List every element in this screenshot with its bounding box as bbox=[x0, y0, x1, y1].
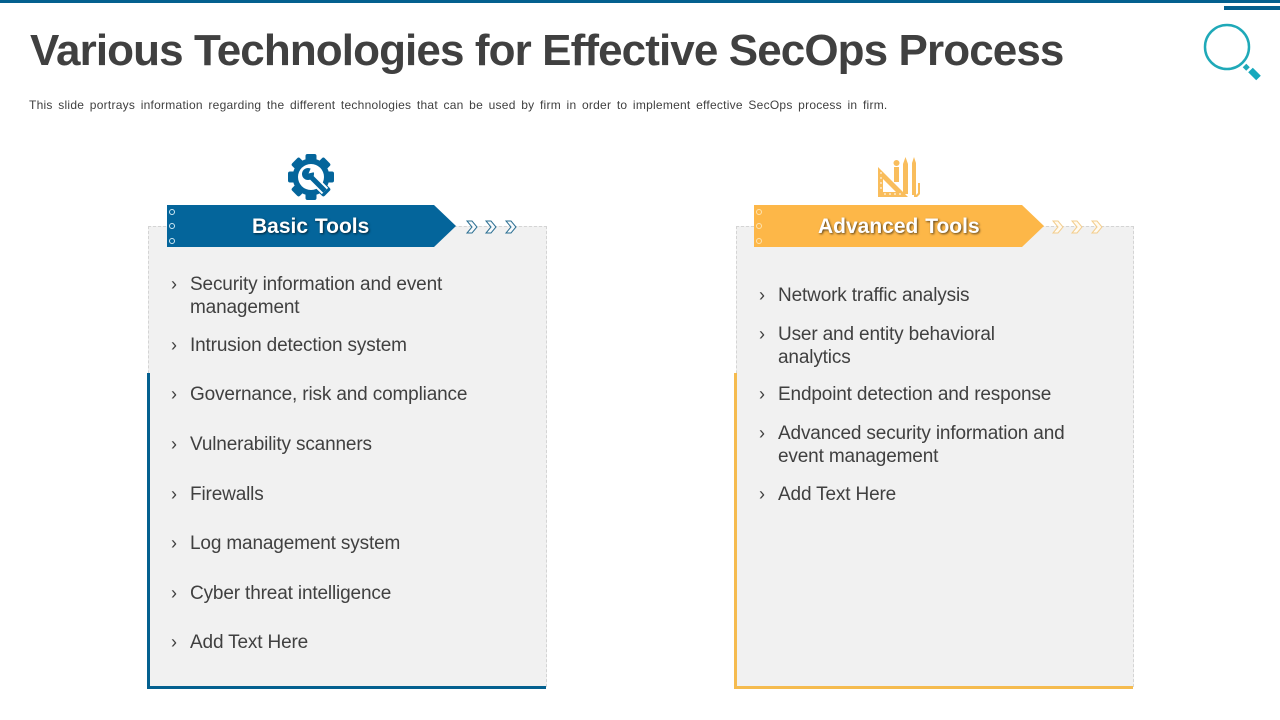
item: Governance, risk and compliance bbox=[190, 384, 467, 405]
item: User and entity behavioral bbox=[778, 324, 995, 345]
header: basic tools bbox=[167, 205, 456, 247]
chevrons: advanced tools bbox=[1052, 220, 1102, 234]
icon: gear and wrench bbox=[288, 154, 334, 200]
icon: drafting tools bbox=[878, 157, 920, 197]
subtitle: This slide portrays information regarding the different technologies that can be used by firm in order to implement effective SecOps process in firm. bbox=[29, 98, 888, 112]
text: › bbox=[171, 434, 177, 454]
item bbox=[759, 423, 1065, 467]
item: Endpoint detection and response bbox=[778, 384, 1051, 405]
item: Cyber threat intelligence bbox=[190, 583, 391, 604]
title: Various Technologies for Effective SecOps Process bbox=[30, 26, 1063, 75]
text: › bbox=[171, 583, 177, 603]
text: › bbox=[171, 632, 177, 652]
text: › bbox=[759, 324, 765, 344]
header text: basic tools: Basic Tools bbox=[252, 215, 369, 238]
panel: basic tools bbox=[148, 226, 547, 687]
text: › bbox=[759, 384, 765, 404]
chevrons: basic tools bbox=[466, 220, 517, 234]
item: Log management system bbox=[190, 533, 400, 554]
text: › bbox=[171, 384, 177, 404]
header text: advanced tools: Advanced Tools bbox=[818, 215, 980, 238]
item: event management bbox=[778, 446, 938, 467]
header: advanced tools bbox=[754, 205, 1044, 247]
text: › bbox=[759, 423, 765, 443]
item: Network traffic analysis bbox=[778, 285, 969, 306]
panel edge: basic tools bbox=[147, 373, 546, 689]
text: › bbox=[759, 484, 765, 504]
item bbox=[759, 324, 995, 368]
text: › bbox=[171, 335, 177, 355]
panel: advanced tools bbox=[736, 226, 1134, 687]
item: Firewalls bbox=[190, 484, 264, 505]
text: › bbox=[171, 484, 177, 504]
top right accent bar bbox=[1224, 6, 1280, 10]
list: basic tools bbox=[171, 274, 467, 653]
panel edge: advanced tools bbox=[734, 373, 1133, 689]
item: analytics bbox=[778, 347, 851, 368]
list: advanced tools bbox=[759, 285, 1065, 505]
text: › bbox=[759, 285, 765, 305]
item: Intrusion detection system bbox=[190, 335, 407, 356]
item bbox=[171, 274, 442, 318]
text: › bbox=[171, 274, 177, 294]
item: Add Text Here bbox=[778, 484, 896, 505]
item: Security information and event bbox=[190, 274, 442, 295]
item: Advanced security information and bbox=[778, 423, 1065, 444]
text: › bbox=[171, 533, 177, 553]
item: management bbox=[190, 297, 299, 318]
item: Vulnerability scanners bbox=[190, 434, 372, 455]
icon: magnifying glass bbox=[1204, 24, 1261, 80]
top rule bbox=[0, 0, 1280, 3]
item: Add Text Here bbox=[190, 632, 308, 653]
